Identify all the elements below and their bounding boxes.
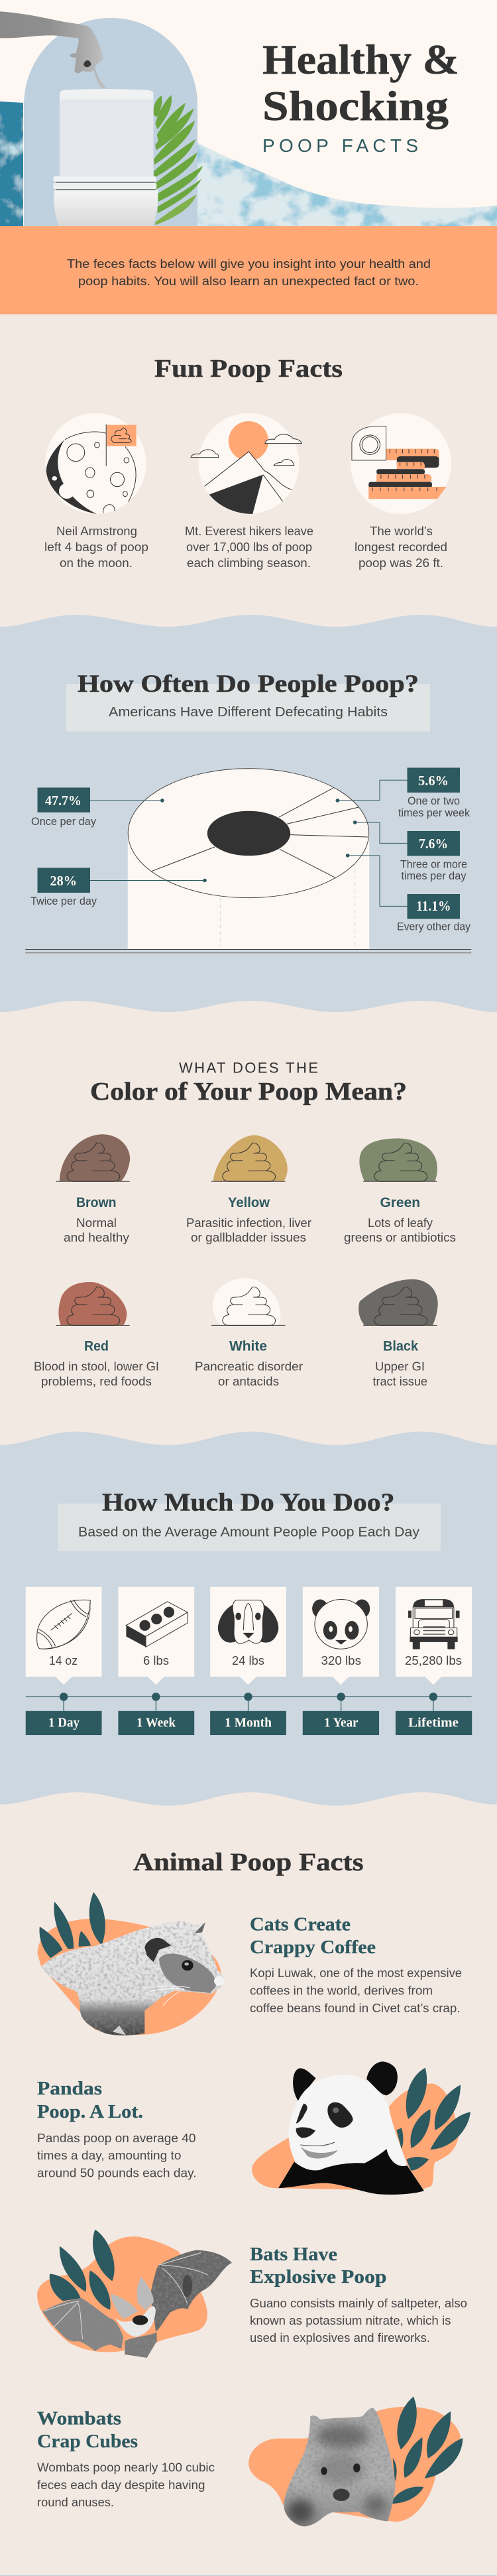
- text: pandas: Pandas poop on average 40: [37, 2131, 196, 2145]
- callout: 28%: Twice per day: [30, 895, 97, 907]
- fern: [154, 95, 203, 225]
- title: Shocking: [262, 83, 449, 129]
- text: wombats: round anuses.: [37, 2495, 114, 2509]
- title: POOP FACTS: [262, 135, 418, 156]
- label: white: White: [229, 1338, 267, 1354]
- time labels: Lifetime: [408, 1715, 459, 1730]
- fact text: moon: on the moon.: [60, 556, 133, 570]
- text: wombats: Crap Cubes: [37, 2431, 138, 2452]
- time labels: [48, 1715, 459, 1730]
- text: cats: [250, 1914, 462, 2015]
- art: wombat: [248, 2396, 463, 2526]
- heading: Color of Your Poop Mean?: [90, 1078, 407, 1106]
- text: pandas: Pandas: [37, 2078, 102, 2099]
- icon: white: [211, 1278, 285, 1325]
- amounts: 24 lbs: [232, 1653, 264, 1667]
- callout: 11.1%: 11.1%: [416, 898, 451, 914]
- water texture left: [0, 101, 23, 226]
- panel: fun poop facts: [0, 314, 497, 619]
- text: wombats: [37, 2408, 215, 2509]
- fact text: longest: [355, 524, 447, 570]
- amounts: [49, 1653, 462, 1667]
- fact text: moon: left 4 bags of poop: [44, 540, 148, 554]
- time labels: 1 Day: [48, 1715, 80, 1730]
- icon: panda: [312, 1600, 370, 1649]
- art: civet: [37, 1892, 225, 2035]
- text: pandas: around 50 pounds each day.: [37, 2166, 196, 2179]
- toilet: [53, 89, 158, 226]
- fact text: longest: poop was 26 ft.: [359, 556, 443, 570]
- text: bats: Explosive Poop: [250, 2266, 387, 2287]
- time labels: 1 Week: [137, 1715, 176, 1730]
- text: cats: Cats Create: [250, 1914, 351, 1935]
- icon: brick: [126, 1602, 188, 1647]
- label: green: Lots of leafy: [368, 1216, 433, 1230]
- subtitle: Americans Have Different Defecating Habits: [109, 705, 388, 720]
- icon: brown: [56, 1134, 130, 1181]
- art: panda: [252, 2061, 470, 2195]
- callout: 7.6%: Three or more: [400, 858, 467, 870]
- heading: How Often Do People Poop?: [78, 671, 419, 698]
- label: white: or antacids: [218, 1374, 279, 1388]
- callout: 11.1%: Every other day: [397, 921, 470, 933]
- callout: 7.6%: [400, 831, 467, 882]
- time labels: 1 Month: [225, 1715, 272, 1730]
- callout: 47.7%: 47.7%: [45, 793, 82, 808]
- amounts: 320 lbs: [321, 1653, 361, 1667]
- arm: [0, 11, 108, 89]
- time labels: 1 Year: [324, 1715, 359, 1730]
- text: pandas: times a day, amounting to: [37, 2148, 182, 2162]
- label: white: [195, 1338, 303, 1388]
- intro band: poop habits. You will also learn an unexpected fact or two.: [78, 275, 419, 288]
- chart: toilet roll: [25, 769, 471, 953]
- callout: 5.6%: 5.6%: [418, 773, 449, 789]
- label: black: Upper GI: [375, 1360, 425, 1373]
- text: pandas: Poop. A Lot.: [37, 2101, 143, 2122]
- icon: red: [56, 1282, 130, 1325]
- label: black: tract issue: [372, 1374, 427, 1388]
- label: black: Black: [383, 1338, 418, 1354]
- label: red: Red: [84, 1338, 109, 1354]
- panel: how much: [0, 1431, 497, 1827]
- label: yellow: or gallbladder issues: [191, 1230, 306, 1244]
- label: red: problems, red foods: [41, 1374, 152, 1388]
- callout: 5.6%: One or two: [408, 795, 460, 807]
- subtitle: Based on the Average Amount People Poop Each Day: [78, 1525, 419, 1540]
- label: yellow: Parasitic infection, liver: [186, 1216, 311, 1230]
- text: wombats: Wombats poop nearly 100 cubic: [37, 2461, 215, 2474]
- title: [262, 36, 459, 156]
- panel: poop colors: [34, 1060, 456, 1388]
- text: bats: used in explosives and fireworks.: [250, 2331, 430, 2345]
- callout: 47.7%: Once per day: [31, 815, 96, 828]
- text: pandas: [37, 2078, 196, 2179]
- label: brown: and healthy: [64, 1230, 130, 1244]
- callout: 28%: 28%: [50, 873, 77, 889]
- text: wombats: feces each day despite having: [37, 2478, 205, 2492]
- text: bats: Bats Have: [250, 2244, 337, 2265]
- icon: dog: [218, 1600, 278, 1643]
- fact text: longest: The world’s: [370, 524, 433, 538]
- icon: bus: [408, 1599, 460, 1649]
- icon: football: [37, 1600, 91, 1649]
- label: green: [344, 1195, 456, 1244]
- callout: 28%: [30, 868, 97, 907]
- text: cats: Kopi Luwak, one of the most expensive: [250, 1966, 462, 1980]
- intro band: The feces facts below will give you insight into your health and: [67, 257, 431, 271]
- amounts: 25,280 lbs: [405, 1653, 462, 1667]
- icon: yellow: [211, 1135, 288, 1181]
- fact text: longest: longest recorded: [355, 540, 447, 554]
- label: red: Blood in stool, lower GI: [34, 1360, 159, 1373]
- icon: tape measure: [351, 413, 451, 514]
- subtitle panel: [58, 1504, 441, 1551]
- color icons: [56, 1134, 438, 1325]
- fact text: moon: [44, 524, 148, 570]
- fact text: moon: Neil Armstrong: [56, 524, 137, 538]
- amounts: 14 oz: [49, 1653, 78, 1667]
- fact text: everest: over 17,000 lbs of poop: [186, 540, 312, 554]
- label: brown: Brown: [76, 1195, 117, 1210]
- heading: WHAT DOES THE: [179, 1060, 318, 1076]
- intro band: [0, 226, 497, 314]
- icon: moon with flag: [45, 413, 146, 514]
- callout: 7.6%: times per day: [402, 869, 467, 882]
- callout: 5.6%: times per week: [398, 806, 470, 819]
- heading: [90, 1060, 407, 1106]
- water wave right: [197, 143, 497, 226]
- callout: 7.6%: 7.6%: [419, 836, 448, 852]
- fact text: everest: Mt. Everest hikers leave: [185, 524, 313, 538]
- heading: Animal Poop Facts: [133, 1848, 363, 1876]
- callout: 47.7%: [31, 788, 96, 828]
- text: cats: Crappy Coffee: [250, 1937, 376, 1958]
- heading: Fun Poop Facts: [154, 355, 343, 383]
- icon: mountain: [191, 413, 302, 514]
- text: bats: [250, 2244, 467, 2345]
- amounts: 6 lbs: [143, 1653, 169, 1667]
- label: brown: Normal: [76, 1216, 117, 1230]
- subtitle panel: [66, 684, 430, 732]
- label: white: Pancreatic disorder: [195, 1360, 303, 1373]
- icon: black: [359, 1279, 438, 1325]
- icon: green: [359, 1138, 437, 1181]
- title: Healthy &: [262, 36, 459, 83]
- label: green: Green: [380, 1195, 420, 1210]
- label: red: [34, 1338, 159, 1388]
- callout: 11.1%: [397, 894, 470, 933]
- text: cats: coffee beans found in Civet cat’s crap.: [250, 2001, 460, 2015]
- bottom edge strip: [0, 2575, 497, 2576]
- label: green: greens or antibiotics: [344, 1230, 456, 1244]
- label: yellow: [186, 1195, 311, 1244]
- panel: animal poop facts: [37, 1848, 470, 2526]
- panel: how often: [0, 615, 497, 1012]
- label: black: [372, 1338, 427, 1388]
- art: bat: [37, 2230, 232, 2358]
- text: bats: known as potassium nitrate, which is: [250, 2313, 451, 2327]
- arch: [24, 18, 197, 226]
- callout: 5.6%: [398, 768, 470, 819]
- hero panel: [0, 0, 497, 226]
- text: cats: coffees in the world, derives from: [250, 1983, 433, 1998]
- heading: How Much Do You Doo?: [102, 1488, 395, 1516]
- fact text: everest: [185, 524, 313, 570]
- text: wombats: Wombats: [37, 2408, 121, 2429]
- text: bats: Guano consists mainly of saltpeter, also: [250, 2296, 467, 2310]
- label: yellow: Yellow: [228, 1195, 270, 1210]
- timeline: [26, 1587, 472, 1735]
- fact text: everest: each climbing season.: [187, 556, 311, 570]
- label: brown: [64, 1195, 130, 1244]
